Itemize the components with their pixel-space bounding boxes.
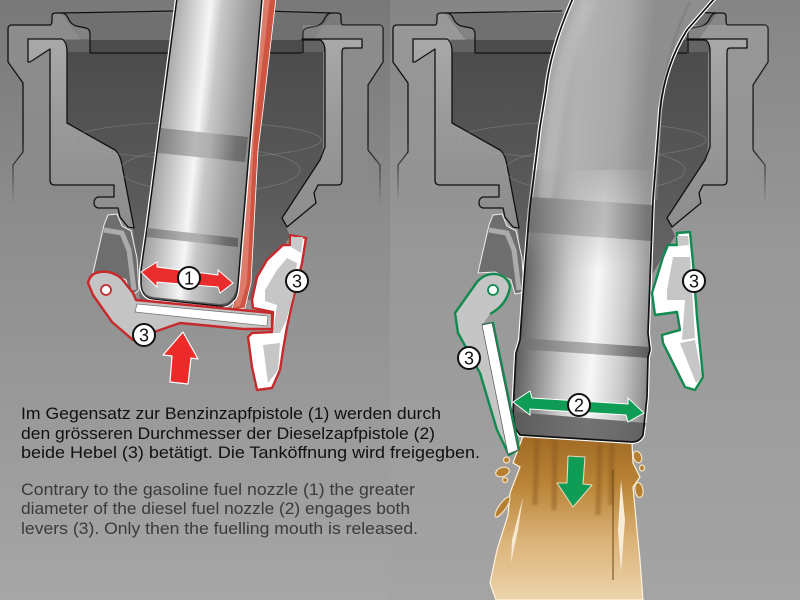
diesel nozzle bbox=[513, 0, 715, 442]
label 1 bbox=[178, 267, 200, 289]
text block: English: Contrary to the gasoline fuel nozzle (1) the greater bbox=[21, 481, 416, 499]
red contact stripe bbox=[232, 0, 276, 310]
arrow: width of diesel nozzle bbox=[513, 391, 644, 422]
label 3 left lever diesel bbox=[458, 347, 480, 369]
gasoline nozzle bbox=[141, 0, 262, 306]
label 3 left lever diesel: 3 bbox=[464, 348, 474, 368]
arrow: width of gasoline nozzle bbox=[141, 262, 233, 293]
tank filler housing right bbox=[393, 11, 768, 300]
label 3 right lever diesel bbox=[683, 270, 705, 292]
label 2: 2 bbox=[574, 396, 584, 416]
text block: German: beide Hebel (3) betätigt. Die Tanköffnung wird freigegben. bbox=[21, 444, 480, 462]
fuel jet bbox=[490, 436, 643, 600]
lever 3 left with bar, red outline bbox=[88, 272, 272, 340]
text block: German bbox=[21, 405, 480, 462]
label 3 right lever diesel: 3 bbox=[689, 272, 699, 292]
text block: English: levers (3). Only then the fuelling mouth is released. bbox=[21, 520, 418, 538]
text block: German: den grösseren Durchmesser der Dieselzapfpistole (2) bbox=[21, 425, 435, 443]
label 3 right lever bbox=[286, 270, 308, 292]
lever 3 left, green outline bbox=[455, 274, 519, 455]
lever 3 right, red outline bbox=[248, 235, 306, 390]
label 3 left lever bbox=[133, 324, 155, 346]
lever 3 right, green outline bbox=[652, 232, 703, 390]
panel: gasoline nozzle (left) bbox=[8, 0, 383, 390]
label 3 right lever: 3 bbox=[292, 272, 302, 292]
tank filler housing left bbox=[8, 11, 383, 300]
fuel splashes bbox=[493, 450, 644, 519]
arrow: fuel flow down bbox=[557, 456, 592, 507]
text block: English: diameter of the diesel fuel nozzle (2) engages both bbox=[21, 500, 410, 518]
text block: English bbox=[21, 481, 418, 538]
label 3 left lever: 3 bbox=[139, 326, 149, 346]
panel: diesel nozzle (right) bbox=[393, 0, 768, 600]
text block: German: Im Gegensatz zur Benzinzapfpistole (1) werden durch bbox=[21, 405, 441, 423]
label 1: 1 bbox=[184, 268, 194, 288]
label 2 bbox=[568, 394, 590, 416]
arrow: push up bbox=[163, 332, 198, 384]
